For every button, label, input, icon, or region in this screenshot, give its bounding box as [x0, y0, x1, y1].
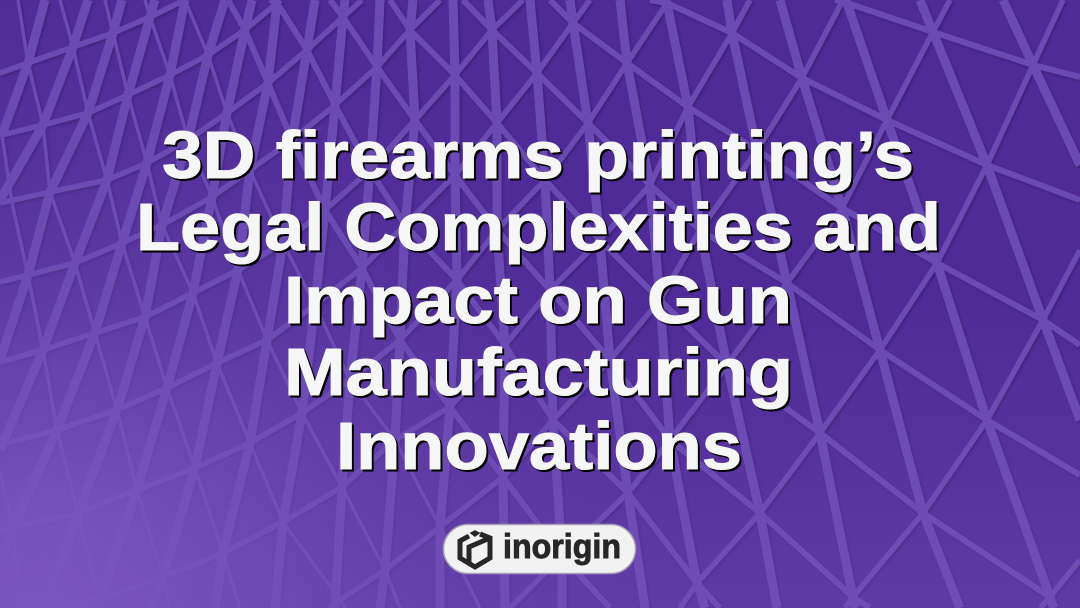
- title line 1: 3D firearms printing’s: [162, 118, 914, 193]
- logo wordmark: inorigin: [503, 528, 621, 566]
- logo badge: [444, 524, 636, 574]
- title line 4: Manufacturing: [284, 335, 793, 410]
- icon: hexagonal cube: [460, 531, 490, 567]
- title line 3: Impact on Gun: [284, 263, 792, 338]
- title line 5: Innovations: [336, 409, 742, 484]
- logo pill: [444, 524, 636, 574]
- title: [136, 118, 941, 484]
- title line 2: Legal Complexities and: [136, 190, 941, 265]
